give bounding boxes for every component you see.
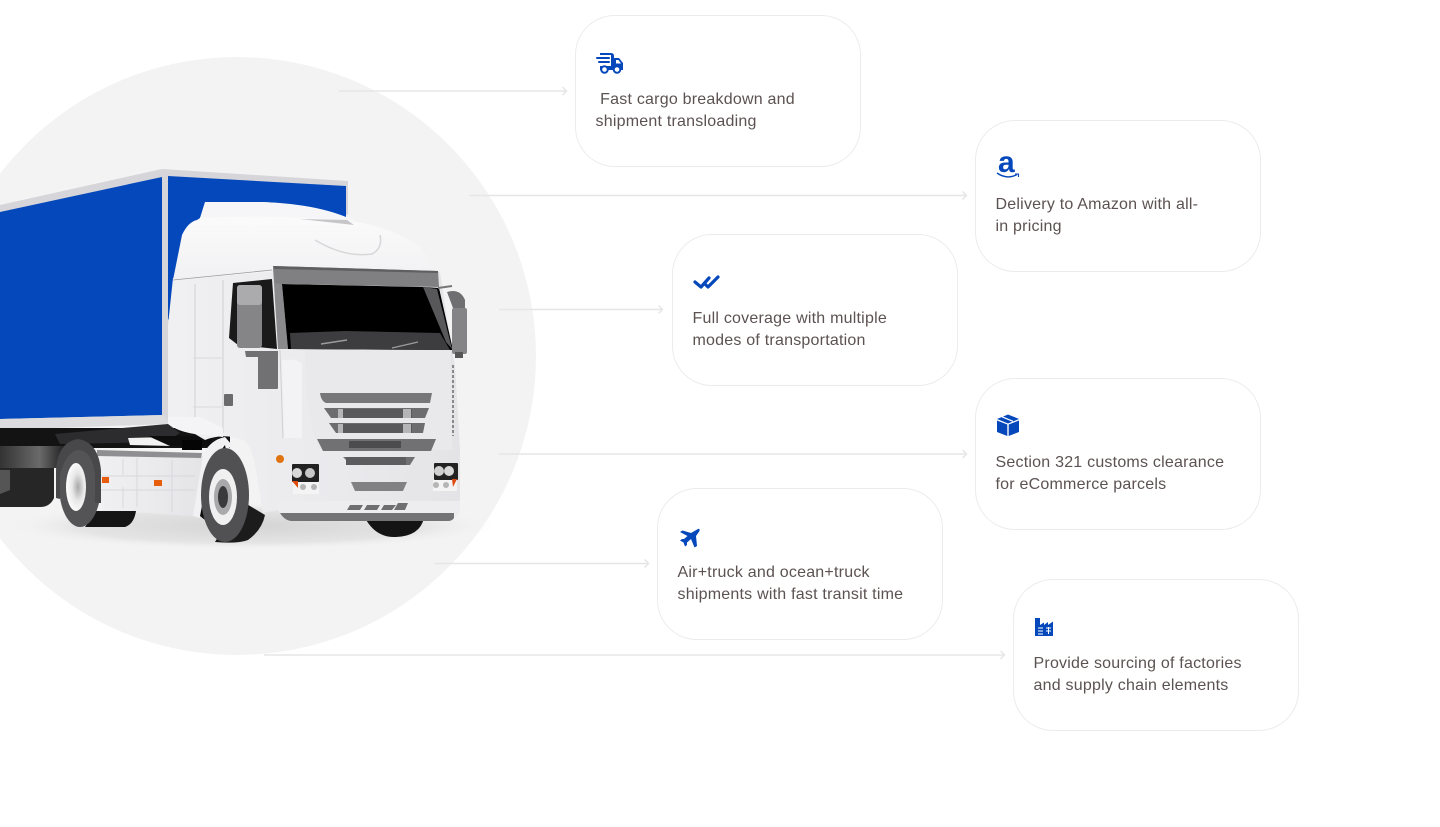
text: coverage: Full coverage with multiple bbox=[692, 310, 887, 327]
cab roof and spoiler bbox=[173, 202, 432, 280]
text: sourcing: and supply chain elements bbox=[1034, 677, 1228, 694]
text: customs: Section 321 customs clearance bbox=[996, 454, 1224, 471]
right mirror bbox=[438, 286, 467, 358]
side window and door details bbox=[224, 279, 278, 406]
panel: Amazon delivery bbox=[975, 120, 1261, 272]
text: fast cargo: Fast cargo breakdown and bbox=[600, 91, 795, 108]
arrow: to Amazon card bbox=[469, 192, 966, 200]
text: sourcing: Provide sourcing of factories bbox=[1034, 655, 1242, 672]
side skirt bbox=[97, 450, 205, 516]
panel: Section 321 customs bbox=[975, 378, 1261, 530]
text: Amazon: in pricing bbox=[996, 218, 1062, 235]
panel: fast cargo breakdown bbox=[575, 15, 861, 167]
arrow: to cargo card bbox=[339, 87, 566, 95]
text: air and ocean: Air+truck and ocean+truck bbox=[678, 564, 870, 581]
windscreen and visor bbox=[273, 266, 453, 350]
text: coverage: modes of transportation bbox=[692, 332, 866, 349]
chassis bbox=[0, 424, 230, 507]
bumper and headlights bbox=[276, 455, 460, 521]
text: air and ocean bbox=[678, 564, 903, 603]
panel: full coverage bbox=[672, 234, 958, 386]
icon: fast delivery truck bbox=[596, 53, 623, 74]
rear wheel bbox=[56, 439, 136, 527]
text: customs bbox=[996, 454, 1224, 493]
ground shadow bbox=[5, 502, 495, 550]
right front tyre bbox=[365, 518, 424, 537]
text: fast cargo bbox=[596, 91, 795, 130]
panel: air and ocean truck bbox=[657, 488, 943, 640]
arrow: to air+truck card bbox=[434, 560, 648, 568]
icon: factory bbox=[1035, 618, 1053, 636]
front wheel bbox=[193, 437, 265, 543]
icon: parcel box bbox=[997, 414, 1019, 436]
arrow: to coverage card bbox=[499, 306, 662, 314]
text: Amazon bbox=[996, 196, 1198, 235]
text: air and ocean: shipments with fast transit time bbox=[678, 586, 903, 603]
cab body bbox=[168, 266, 460, 516]
text: sourcing bbox=[1034, 655, 1242, 694]
text: fast cargo: shipment transloading bbox=[596, 113, 757, 130]
text: coverage bbox=[692, 310, 887, 349]
arrow: to customs card bbox=[499, 450, 966, 458]
arrow: to sourcing card bbox=[264, 651, 1004, 659]
grille bbox=[317, 365, 453, 491]
text: Amazon: Delivery to Amazon with all- bbox=[996, 196, 1198, 213]
text: customs: for eCommerce parcels bbox=[996, 476, 1166, 493]
icon: double check bbox=[693, 275, 720, 289]
icon: Amazon logo: a bbox=[998, 146, 1015, 179]
icon: airplane bbox=[680, 528, 700, 548]
trailer bbox=[0, 169, 348, 430]
panel: sourcing bbox=[1013, 579, 1299, 731]
